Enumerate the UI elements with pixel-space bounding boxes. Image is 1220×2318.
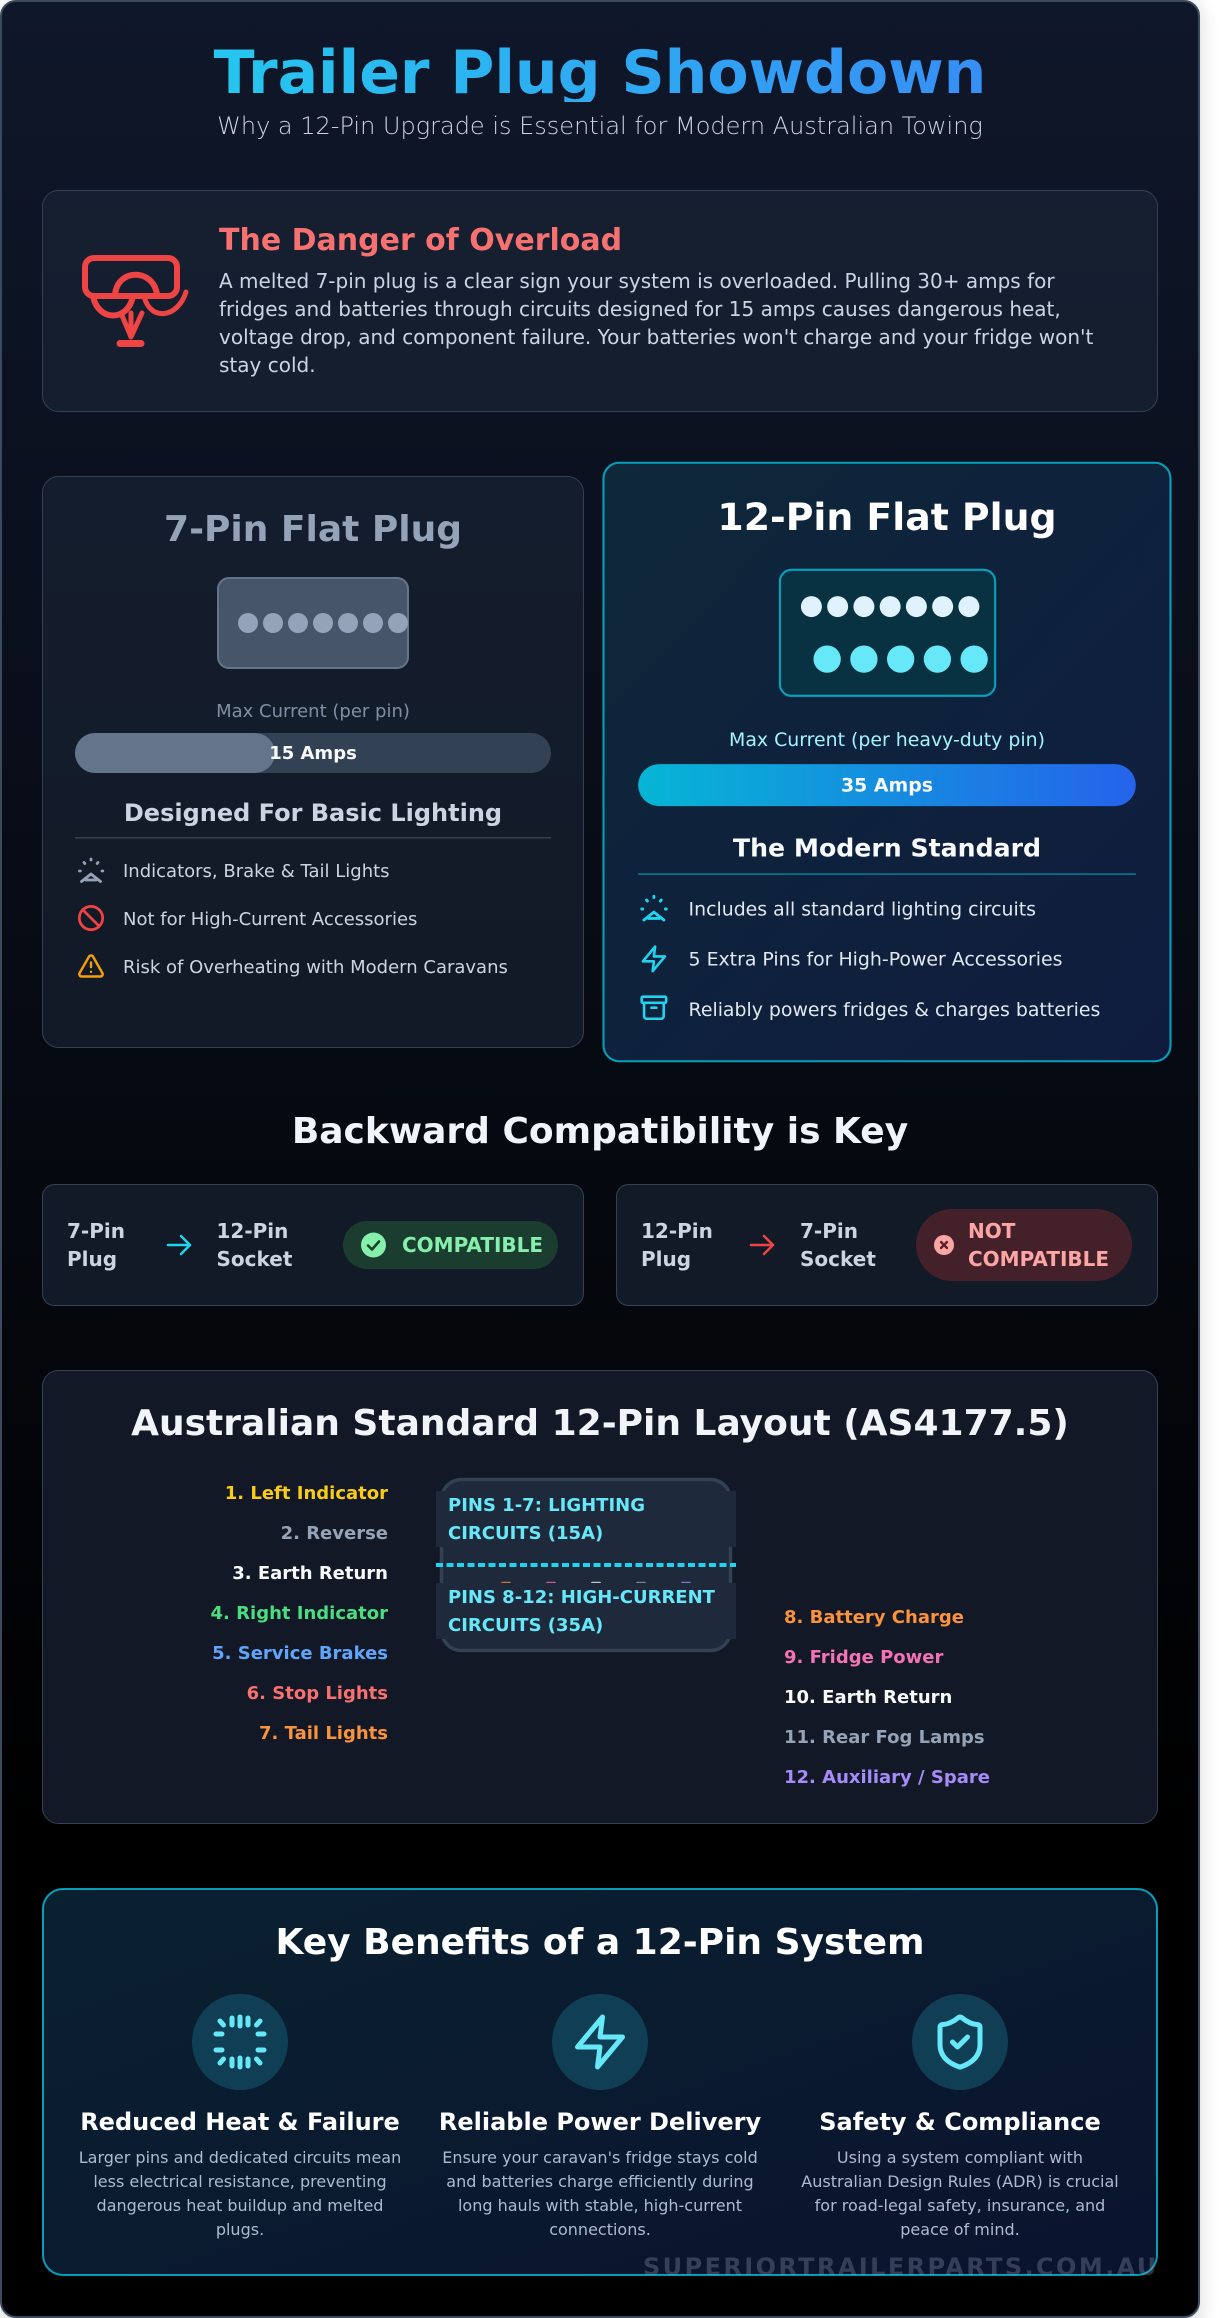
list item: lighting circuits: Includes all standard lighting circuits <box>689 898 1036 920</box>
heading: 12-pin: 12-Pin Flat Plug <box>717 495 1057 539</box>
panel: key benefits <box>43 1889 1157 2275</box>
list item: not for high current: Not for High-Current Accessories <box>123 909 417 930</box>
watermark: SUPERIORTRAILERPARTS.COM.AU <box>643 2253 1159 2281</box>
heading: key benefits: Key Benefits of a 12-Pin System <box>275 1922 925 1963</box>
subheading: modern standard: The Modern Standard <box>733 834 1041 863</box>
panel: 7-pin plug into 12-pin socket <box>42 1184 584 1306</box>
left pin labels: 2. Reverse <box>281 1523 388 1544</box>
heading: 12-pin layout: Australian Standard 12-Pin Layout (AS4177.5) <box>131 1403 1069 1444</box>
heading: reduced heat: Reduced Heat & Failure <box>80 2108 400 2136</box>
benefit: reduced heat <box>79 1994 401 2239</box>
text: safety: peace of mind. <box>900 2220 1020 2239</box>
panel: danger of overload <box>42 190 1158 412</box>
panel: 12-pin flat plug <box>604 463 1170 1061</box>
icon: lightning bolt <box>578 2017 622 2067</box>
label: max current: Max Current (per pin) <box>216 701 410 722</box>
danger description: fridges and batteries through circuits designed for 15 amps causes dangerous heat, <box>219 297 1061 321</box>
right pin labels: 11. Rear Fog Lamps <box>784 1727 985 1748</box>
badge: not compatible <box>916 1209 1132 1281</box>
icon: heat <box>216 2017 264 2067</box>
current bar: 15 amps <box>75 733 551 773</box>
list item: overheating risk: Risk of Overheating with Modern Caravans <box>123 957 508 978</box>
text: reliable power: connections. <box>549 2220 651 2239</box>
text: safety: Using a system compliant with <box>837 2148 1083 2167</box>
panel: 12-pin plug into 7-pin socket <box>616 1184 1158 1306</box>
socket label: 12-Pin <box>216 1219 288 1243</box>
left pin labels: 7. Tail Lights <box>259 1723 388 1744</box>
text: reduced heat: less electrical resistance, preventing <box>93 2172 387 2191</box>
plug illustration: 12-pin <box>780 570 995 696</box>
left pin labels: 1. Left Indicator <box>225 1483 388 1504</box>
heading: safety: Safety & Compliance <box>819 2108 1101 2136</box>
right pin labels: 10. Earth Return <box>784 1687 952 1708</box>
current bar: 15 amps: 15 Amps <box>269 743 357 764</box>
subheading: basic lighting: Designed For Basic Lighting <box>124 799 502 827</box>
right pin labels: 12. Auxiliary / Spare <box>784 1767 990 1788</box>
plug illustration: 7-pin <box>218 578 408 668</box>
text: reduced heat: dangerous heat buildup and melted <box>97 2196 383 2215</box>
right pin labels <box>784 1607 990 1788</box>
right pin labels: 8. Battery Charge <box>784 1607 964 1628</box>
label: pins 1-7: CIRCUITS (15A) <box>448 1523 603 1544</box>
danger description: A melted 7-pin plug is a clear sign your system is overloaded. Pulling 30+ amps for <box>219 269 1055 293</box>
label: max current heavy-duty: Max Current (per heavy-duty pin) <box>729 729 1045 751</box>
text: reliable power: Ensure your caravan's fridge stays cold <box>442 2148 758 2167</box>
right pin labels: 9. Fridge Power <box>784 1647 943 1668</box>
text: reliable power: long hauls with stable, high-current <box>458 2196 742 2215</box>
panel: 7-pin flat plug <box>42 476 584 1048</box>
badge: not compatible: NOT <box>968 1219 1016 1243</box>
badge: not compatible: COMPATIBLE <box>968 1247 1109 1271</box>
current bar: 35 amps <box>638 764 1136 806</box>
socket label: Socket <box>800 1247 876 1271</box>
plug label: Plug <box>67 1247 117 1271</box>
left pin labels: 4. Right Indicator <box>211 1603 388 1624</box>
icon: shield check <box>940 2017 980 2067</box>
panel: 12-pin layout <box>42 1370 1158 1824</box>
text: reduced heat: plugs. <box>216 2220 264 2239</box>
current bar: 35 amps: 35 Amps <box>841 774 933 796</box>
danger description: voltage drop, and component failure. Your batteries won't charge and your fridge won't <box>219 325 1094 349</box>
text: safety: for road-legal safety, insurance, and <box>815 2196 1105 2215</box>
plug label: 7-Pin <box>67 1219 125 1243</box>
left pin labels: 6. Stop Lights <box>247 1683 388 1704</box>
badge: compatible <box>343 1221 558 1269</box>
benefit: reliable power <box>439 1994 761 2239</box>
plug diagram <box>436 1480 736 1650</box>
badge: compatible: COMPATIBLE <box>402 1233 543 1257</box>
text: reliable power: and batteries charge efficiently during <box>446 2172 754 2191</box>
text: safety: Australian Design Rules (ADR) is crucial <box>801 2172 1119 2191</box>
left pin labels: 3. Earth Return <box>232 1563 388 1584</box>
socket label: Socket <box>216 1247 293 1271</box>
left pin labels: 5. Service Brakes <box>212 1643 388 1664</box>
subtitle: Why a 12-Pin Upgrade is Essential for Modern Australian Towing <box>217 112 983 140</box>
title: Trailer Plug Showdown <box>214 38 986 108</box>
text: reduced heat: Larger pins and dedicated circuits mean <box>79 2148 401 2167</box>
heading: backward compatibility: Backward Compatibility is Key <box>292 1111 908 1152</box>
list item: extra pins: 5 Extra Pins for High-Power Accessories <box>689 949 1063 971</box>
label: pins 8-12: PINS 8-12: HIGH-CURRENT <box>448 1587 716 1608</box>
heading: 7-pin: 7-Pin Flat Plug <box>164 509 462 550</box>
heading: danger: The Danger of Overload <box>219 223 622 258</box>
heading: reliable power: Reliable Power Delivery <box>439 2108 761 2136</box>
socket label: 7-Pin <box>800 1219 858 1243</box>
label: pins 1-7: PINS 1-7: LIGHTING <box>448 1495 645 1516</box>
list item: powers fridges: Reliably powers fridges & charges batteries <box>689 999 1100 1021</box>
left pin labels <box>211 1483 388 1744</box>
benefit: safety <box>801 1994 1119 2239</box>
arrow: not compatible <box>751 1236 773 1254</box>
arrow: compatible <box>168 1236 190 1254</box>
list item: lighting: Indicators, Brake & Tail Lights <box>123 861 390 882</box>
label: pins 8-12: CIRCUITS (35A) <box>448 1615 603 1636</box>
danger description: stay cold. <box>219 353 316 377</box>
danger description <box>219 269 1094 377</box>
icon: melted plug <box>85 258 186 344</box>
plug label: 12-Pin <box>641 1219 713 1243</box>
plug label: Plug <box>641 1247 691 1271</box>
